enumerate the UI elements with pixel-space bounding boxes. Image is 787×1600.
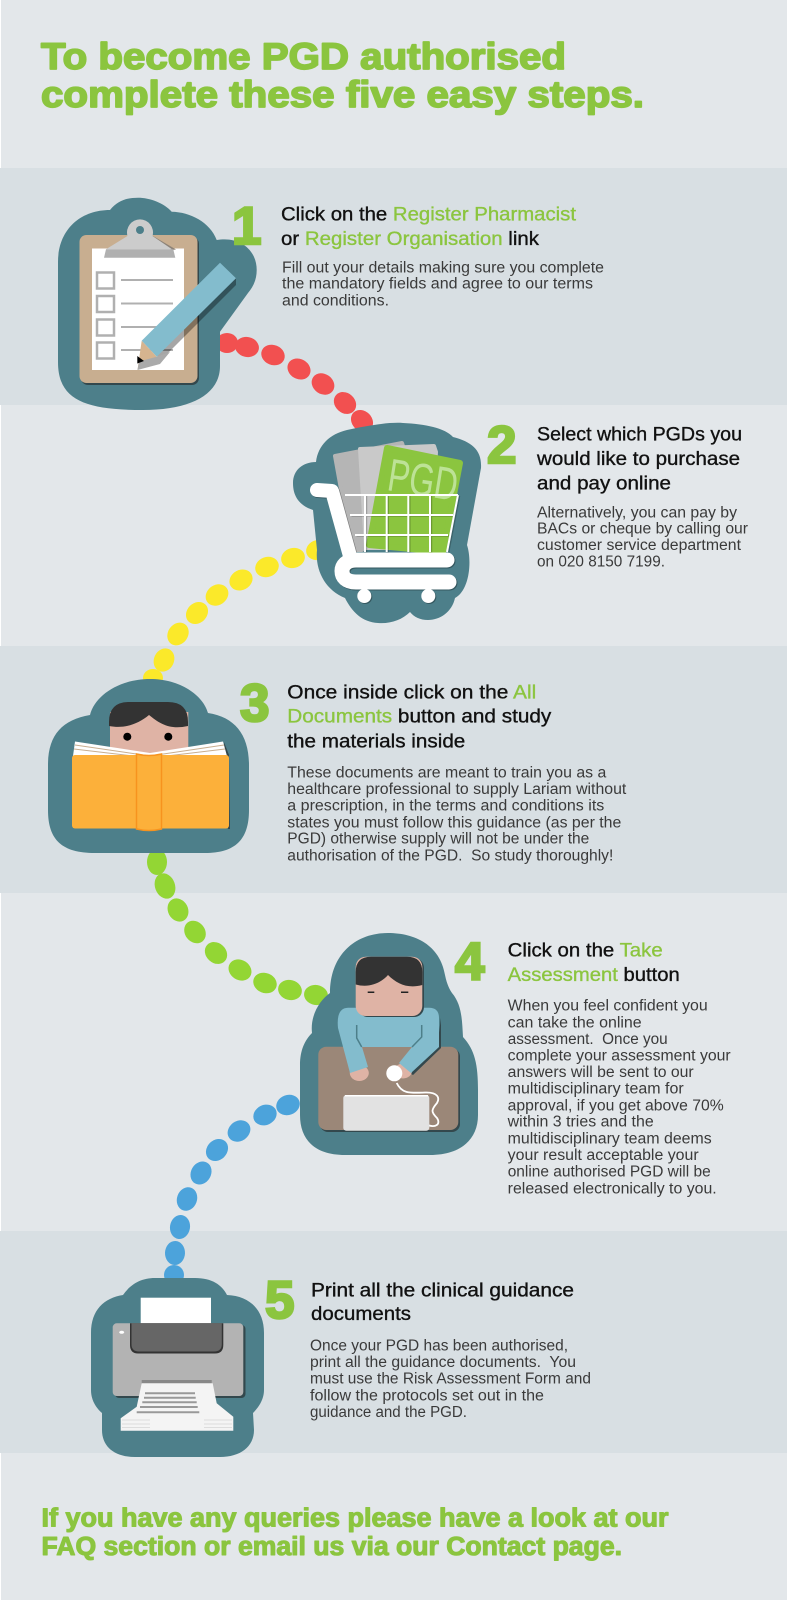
text block: step 3: states you must follow this guidance (as per the	[287, 814, 621, 831]
text block: step 4: complete your assessment your	[508, 1047, 731, 1064]
icon: person reading a book	[48, 679, 249, 853]
dotted path: yellow	[143, 537, 332, 687]
text block: step 4: When you feel confident you	[508, 998, 708, 1015]
panel: step 1 band	[0, 168, 787, 405]
text block: step 3	[287, 681, 627, 864]
text block: step 2: on 020 8150 7199.	[537, 554, 665, 571]
text block: step 3: healthcare professional to supply Lariam without	[287, 781, 627, 798]
text block: step 3: authorisation of the PGD. So study thoroughly!	[287, 847, 613, 864]
dotted path: red	[216, 333, 378, 437]
dotted path: green	[147, 849, 330, 1007]
number 5: 5	[265, 1271, 294, 1330]
text block: step 4: approval, if you get above 70%	[508, 1097, 724, 1114]
text block: step 4: Click on the Take	[508, 940, 663, 962]
text block: step 2: customer service department	[537, 537, 742, 554]
icon: shopping cart with PGD cards	[293, 423, 481, 623]
text block: step 1: the mandatory fields and agree to our terms	[282, 276, 593, 293]
text block: step 2: would like to purchase	[536, 448, 740, 470]
text block: step 5: Print all the clinical guidance	[311, 1280, 574, 1302]
text block: step 1: or Register Organisation link	[281, 228, 539, 250]
panel: step 5 band	[0, 1231, 787, 1453]
text block: step 4: Assessment button	[508, 964, 680, 986]
number 3: 3	[240, 674, 269, 733]
footer message	[42, 1505, 669, 1561]
text block: step 3: the materials inside	[287, 730, 465, 752]
title: complete these five easy steps.	[41, 74, 644, 115]
text block: step 5: must use the Risk Assessment Form and	[310, 1371, 591, 1388]
icon: person taking assessment at desk	[300, 933, 478, 1155]
text block: step 5: documents	[311, 1303, 411, 1325]
text block: step 2: Alternatively, you can pay by	[537, 504, 737, 521]
text block: step 4: within 3 tries and the	[507, 1114, 654, 1131]
text block: step 3: These documents are meant to train you as a	[287, 764, 607, 781]
icon: shopping cart with PGD cards: PGD	[384, 449, 462, 511]
icon: printer	[91, 1278, 264, 1457]
text block: step 4: answers will be sent to our	[508, 1064, 694, 1081]
text block: step 4: your result acceptable your	[508, 1147, 699, 1164]
number 2: 2	[487, 416, 516, 475]
text block: step 3: Documents button and study	[287, 706, 552, 728]
text block: step 4: multidisciplinary team deems	[508, 1130, 712, 1147]
text block: step 3: a prescription, in the terms and conditions its	[287, 798, 605, 815]
text block: step 4: online authorised PGD will be	[508, 1164, 711, 1181]
text block: step 2	[536, 424, 748, 571]
text block: step 5: follow the protocols set out in the	[310, 1387, 544, 1404]
text block: step 4: released electronically to you.	[508, 1180, 717, 1197]
text block: step 1	[281, 204, 604, 309]
title: To become PGD authorised	[41, 36, 566, 77]
text block: step 1: Click on the Register Pharmacist	[281, 204, 577, 226]
text block: step 1: and conditions.	[282, 292, 389, 309]
number 1: 1	[232, 197, 261, 256]
footer message: If you have any queries please have a look at our	[42, 1505, 669, 1533]
text block: step 2: and pay online	[537, 472, 671, 494]
footer message: FAQ section or email us via our Contact page.	[42, 1533, 622, 1561]
panel: step 3 band	[0, 646, 787, 893]
text block: step 5: guidance and the PGD.	[310, 1404, 467, 1421]
dotted path: blue	[164, 1091, 303, 1285]
text block: step 3: PGD) otherwise supply will not be under the	[287, 831, 589, 848]
text block: step 5: print all the guidance documents. You	[310, 1354, 576, 1371]
number 4: 4	[455, 932, 485, 992]
text block: step 2: Select which PGDs you	[537, 424, 742, 446]
text block: step 1: Fill out your details making sure you complete	[282, 260, 604, 277]
text block: step 5: Once your PGD has been authorised,	[310, 1337, 568, 1354]
icon: clipboard and pencil	[58, 198, 257, 410]
text block: step 4	[507, 940, 731, 1197]
text block: step 2: BACs or cheque by calling our	[537, 521, 748, 538]
title	[41, 36, 644, 115]
text block: step 3: Once inside click on the All	[287, 681, 536, 703]
text block: step 4: assessment. Once you	[508, 1031, 668, 1048]
text block: step 4: can take the online	[508, 1014, 642, 1031]
text block: step 4: multidisciplinary team for	[508, 1081, 684, 1098]
text block: step 5	[310, 1280, 591, 1421]
